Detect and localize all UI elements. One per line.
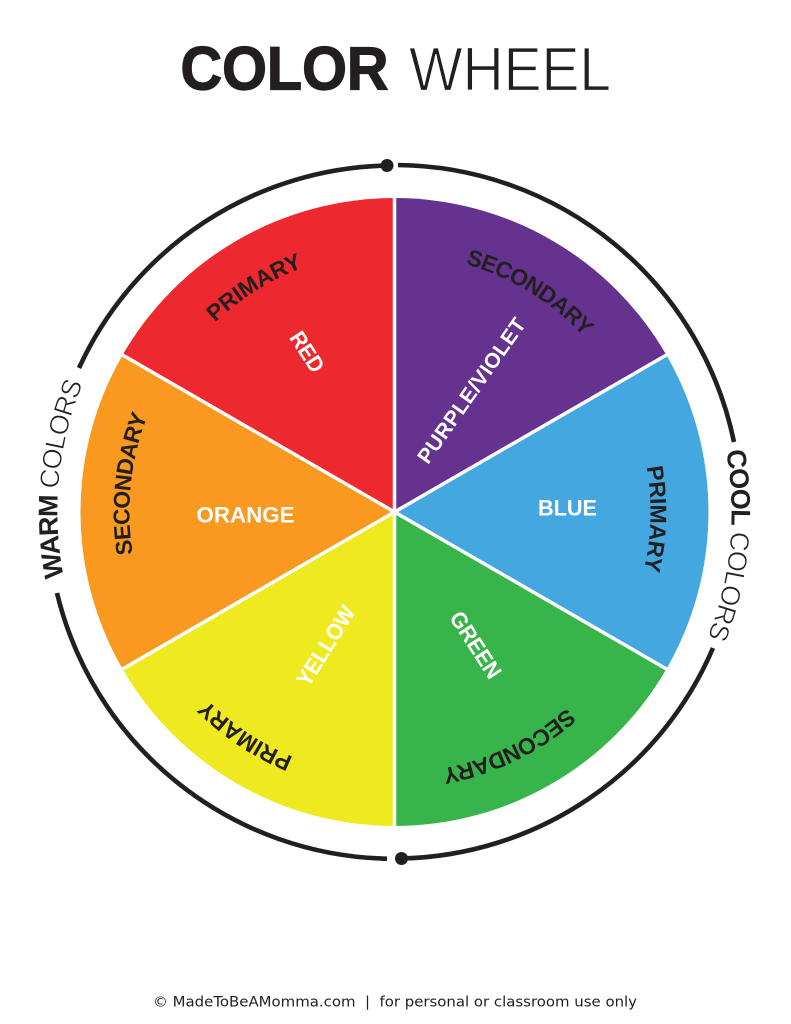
ring marker: bottom dot — [395, 852, 408, 865]
wedge: red — [123, 198, 394, 512]
text: yellow primary: PRIMARY — [196, 704, 292, 771]
text: orange secondary: SECONDARY — [113, 411, 146, 554]
color wheel — [81, 196, 708, 828]
text: orange name: ORANGE — [196, 502, 294, 528]
title: COLOR — [180, 34, 388, 102]
wedge: orange — [81, 355, 394, 669]
text: red name: RED — [285, 327, 329, 377]
text: blue name: BLUE — [538, 496, 597, 520]
label: warm colors: WARM COLORS — [38, 380, 80, 580]
text: purple name: PURPLE/VIOLET — [413, 314, 531, 468]
wedge: blue — [394, 355, 708, 669]
text: blue primary: PRIMARY — [645, 466, 666, 573]
text: red primary: PRIMARY — [206, 253, 298, 322]
wedge: purple — [394, 198, 666, 512]
text: green name: GREEN — [445, 607, 506, 683]
text: purple secondary: SECONDARY — [467, 250, 595, 332]
title: WHEEL — [409, 35, 611, 104]
text: yellow name: YELLOW — [292, 601, 361, 691]
wedge: yellow — [123, 512, 394, 826]
outer ring: warm and cool arcs — [57, 165, 734, 859]
ring marker: top dot — [380, 159, 394, 172]
footer credit: © MadeToBeAMomma.com | for personal or classroom use only — [153, 995, 637, 1011]
title — [180, 34, 611, 104]
text: green secondary: SECONDARY — [446, 710, 574, 784]
label: cool colors: COOL COLORS — [710, 450, 750, 640]
wedge: green — [394, 512, 666, 826]
